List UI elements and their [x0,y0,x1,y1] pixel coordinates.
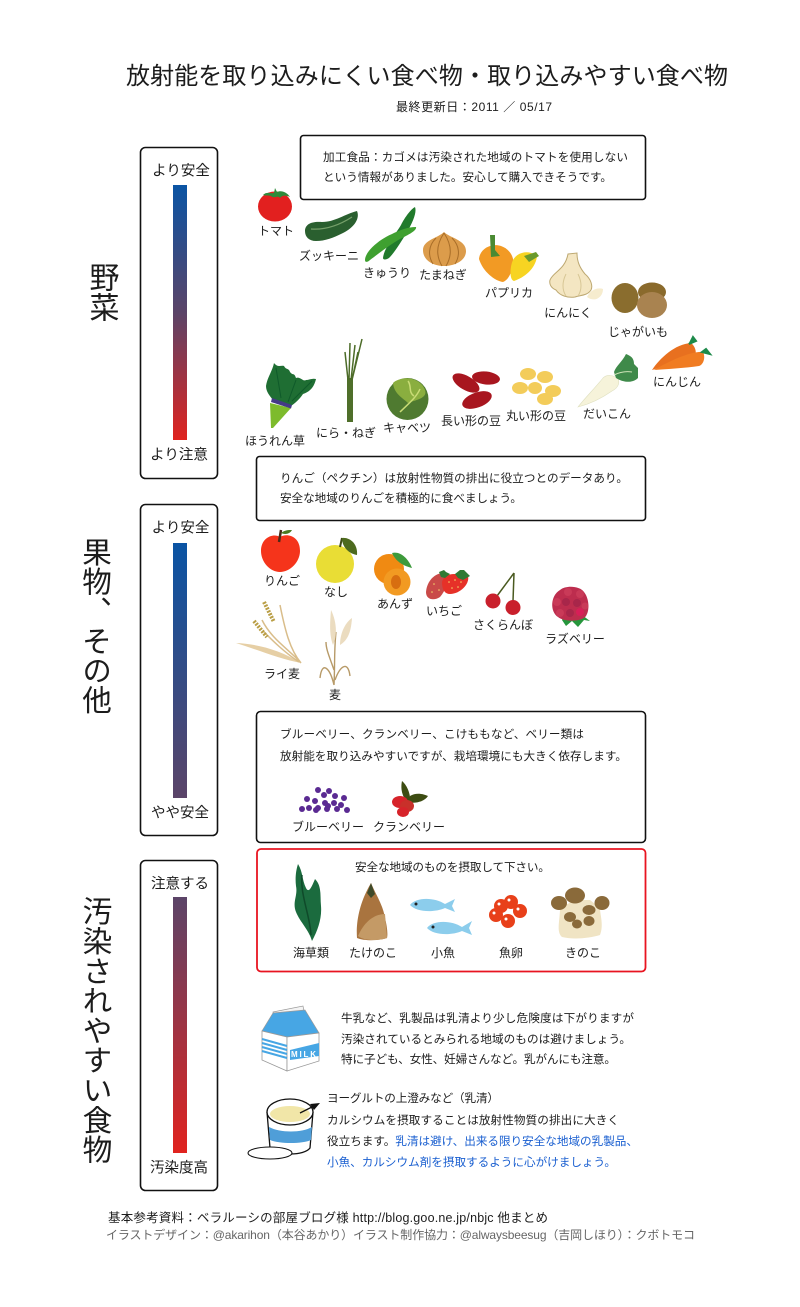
text: milk advice: 牛乳など、乳製品は乳清より少し危険度は下がりますが [341,1011,634,1025]
food: rye [236,602,301,681]
food: round beans: 丸い形の豆 [506,409,566,423]
scale panel: fruits: より安全 [152,520,209,536]
food: cherries [473,573,533,632]
food: cranberries [392,781,428,817]
scale panel: contaminated foods: 注意する [151,876,209,892]
food: small fish [410,899,472,935]
food: zucchini [299,211,359,263]
callout: apple pectin: りんご（ペクチン）は放射性物質の排出に役立つとのデータあり。 [280,471,628,485]
food: garlic [544,253,603,320]
icon: milk carton [262,1006,319,1071]
food: potatoes [608,282,668,339]
food: apple: りんご [264,573,300,588]
label: small fish: 小魚 [431,946,455,960]
food: tomato: トマト [258,224,294,238]
footer: illustration credit: イラストデザイン：@akarihon（本谷あかり）イラスト制作協力：@alwaysbeesug（吉岡しほり）：クボトモコ [106,1227,695,1242]
food: apricot [374,553,413,611]
food: spinach [245,363,316,448]
text: milk advice [341,1011,634,1066]
text: yogurt whey advice [327,1091,638,1169]
food: fish roe [489,895,527,928]
label: mushrooms: きのこ [565,946,601,960]
food: bamboo shoot [357,883,387,940]
food: tomato [258,188,294,238]
food: long beans [441,369,501,428]
food: spinach: ほうれん草 [245,434,305,448]
icon: yogurt cup [248,1099,320,1159]
food: raspberry: ラズベリー [545,631,605,646]
food: apricot: あんず [377,597,413,611]
title: 放射能を取り込みにくい食べ物・取り込みやすい食べ物 [126,63,728,90]
callout: berries: ブルーベリー、クランベリー、こけももなど、ベリー類は [280,727,584,741]
text: yogurt whey advice: カルシウムを摂取することは放射性物質の排出に大きく [327,1113,619,1127]
label: seaweed: 海草類 [293,946,329,960]
food: mushrooms [551,888,610,938]
label: blueberry: ブルーベリー [292,819,364,834]
callout: berries: 放射能を取り込みやすいですが、栽培環境にも大きく依存します。 [280,749,627,763]
scale panel: fruits: やや安全 [151,804,209,822]
food: cabbage [383,378,431,435]
last updated date: 最終更新日：2011 ／ 05/17 [396,99,552,114]
food: pear [316,538,357,599]
text: milk advice: 汚染されているとみられる地域のものは避けましょう。 [341,1032,631,1046]
callout: apple pectin: 安全な地域のりんごを積極的に食べましょう。 [280,491,522,505]
food: wheat [320,610,352,702]
scale panel: contaminated foods: 汚染度高 [150,1160,208,1176]
label: cranberry: クランベリー [373,820,445,834]
scale panel: fruits [140,504,218,836]
food: cucumber [363,207,416,280]
callout: processed foods: 加工食品：カゴメは汚染された地域のトマトを使用しない [323,150,628,164]
callout: berries [256,712,646,842]
footer: source credit: 基本参考資料：ベラルーシの部屋ブログ様 http://blog.goo.ne.jp/nbjc 他まとめ [108,1210,548,1225]
heading: easily contaminated foods: 汚染されやすい食物 [78,896,112,1165]
food: cherries: さくらんぼ [473,618,533,632]
text: yogurt whey advice: ヨーグルトの上澄みなど（乳清） [327,1091,499,1105]
food: wheat: 麦 [329,688,341,702]
text: yogurt whey advice: 小魚、カルシウム剤を摂取するように心がけましょう。 [327,1155,616,1169]
food: chives and leek [316,339,376,440]
label: fish roe: 魚卵 [499,946,523,960]
food: blueberries [299,787,350,813]
text: yogurt whey advice: 役立ちます。乳清は避け、出来る限り安全な地域の乳製品、 [327,1134,638,1148]
food: long beans: 長い形の豆 [441,414,501,428]
scale panel: vegetables: より安全 [152,162,210,180]
food: onion: たまねぎ [419,268,467,282]
food: carrot [652,337,710,389]
food: strawberries: いちご [426,603,462,618]
callout: processed foods [300,136,646,200]
food: apple [261,530,300,588]
food: cabbage: キャベツ [383,421,431,435]
food: seaweed [295,864,321,941]
food: onion [419,232,467,282]
scale panel: vegetables: より注意 [150,446,208,464]
food: raspberry [545,587,605,646]
food: strawberries [426,570,470,618]
food: pear: なし [324,585,348,599]
icon: milk carton: MILK [291,1050,316,1059]
callout: apple pectin [256,456,646,520]
heading: vegetables: 野菜 [84,262,118,322]
food: round beans [506,368,566,423]
scale panel: contaminated foods [140,860,218,1190]
food: cucumber: きゅうり [363,266,411,280]
food: paprika [479,235,539,300]
food: rye: ライ麦 [264,667,300,681]
label: bamboo shoot: たけのこ [349,946,397,960]
red panel: high risk foods: 安全な地域のものを摂取して下さい。 [355,860,550,874]
text: milk advice: 特に子ども、女性、妊婦さんなど。乳がんにも注意。 [341,1052,616,1066]
heading: fruits and others: 果物、その他 [78,537,111,715]
food: chives and leek: にら・ねぎ [316,426,376,440]
food: carrot: にんじん [653,375,701,389]
food: zucchini: ズッキーニ [299,248,359,263]
red panel: high risk foods [257,849,646,972]
food: potatoes: じゃがいも [608,324,668,339]
scale panel: vegetables [140,148,218,478]
food: paprika: パプリカ [485,286,533,300]
food: daikon [578,354,638,421]
food: garlic: にんにく [544,306,592,320]
callout: processed foods: という情報がありました。安心して購入できそうです。 [323,170,612,184]
food: daikon: だいこん [583,407,631,421]
